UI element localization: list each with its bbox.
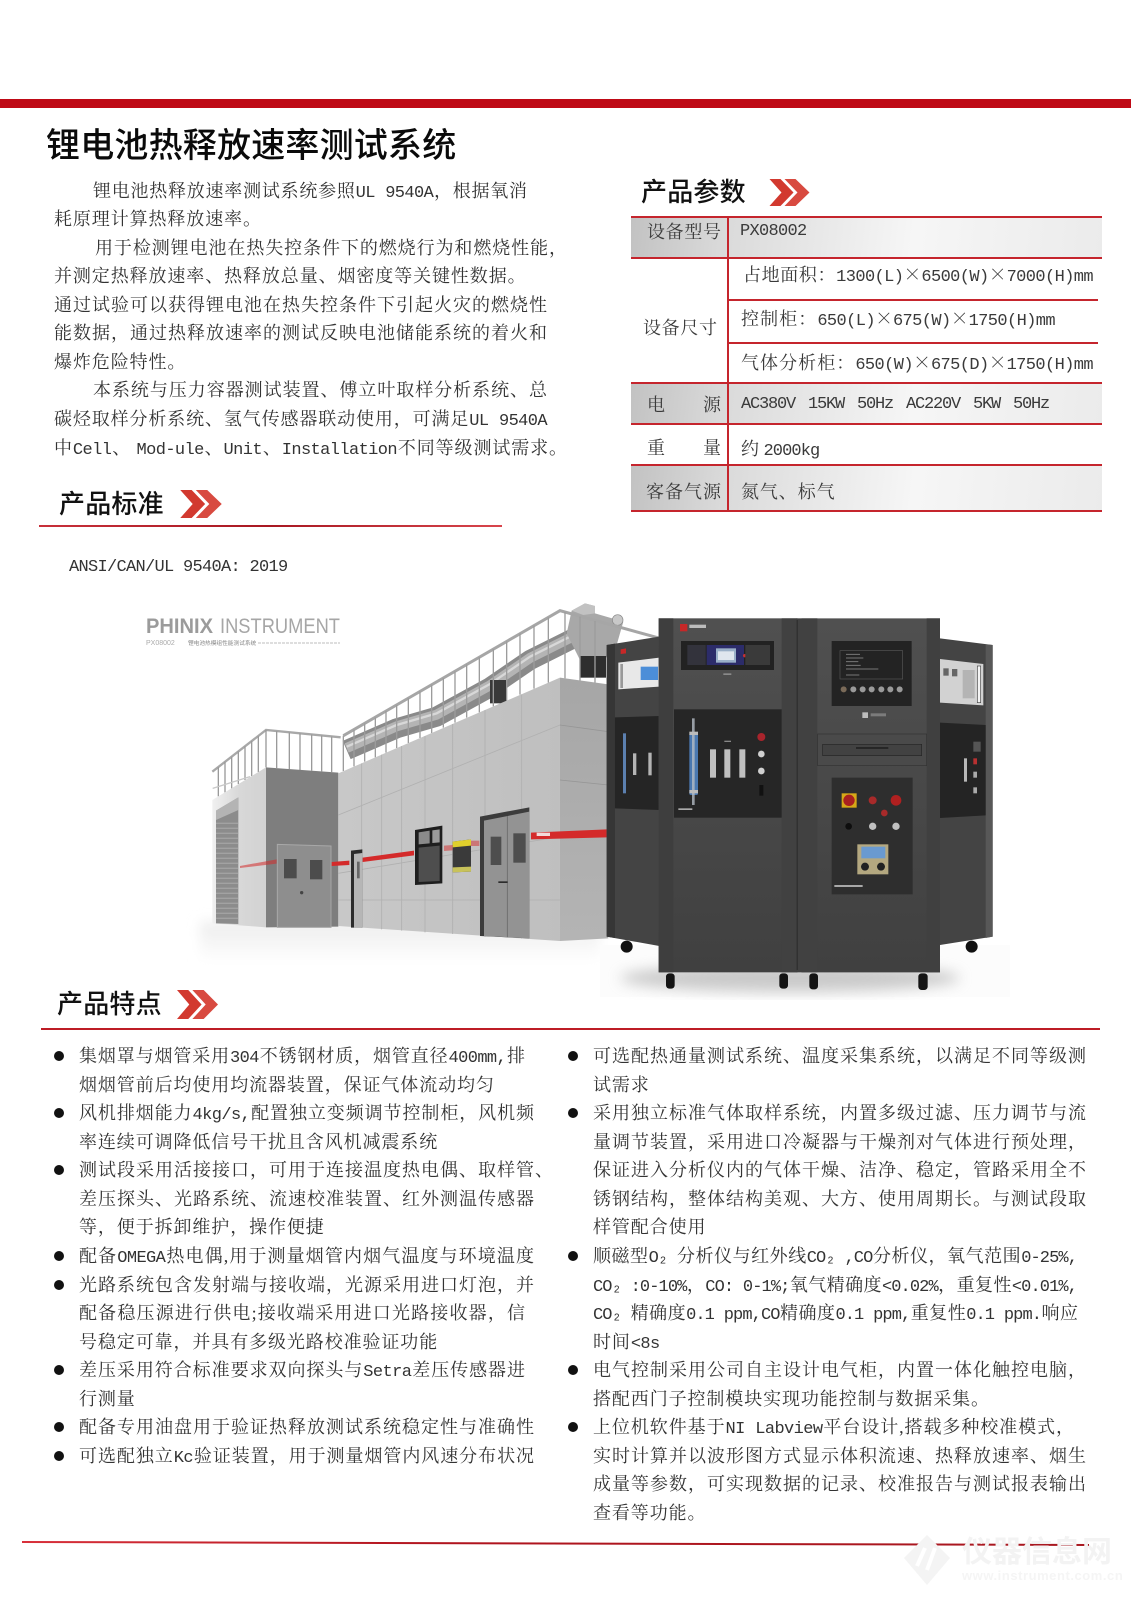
brand text: PX08002 bbox=[146, 640, 175, 647]
intro text block: 通过试验可以获得锂电池在热失控条件下引起火灾的燃烧性 bbox=[54, 295, 547, 315]
feature list: left column: 行测量 bbox=[79, 1389, 136, 1409]
parameter table: 约 2000kg bbox=[741, 439, 819, 461]
feature list: right column: 顺磁型O₂ 分析仪与红外线CO₂ ,CO分析仪，氧气范围0-25%, bbox=[593, 1246, 1077, 1268]
feature list: left column: 烟烟管前后均使用均流器装置，保证气体流动均匀 bbox=[79, 1075, 495, 1095]
intro text block: 中Cell、 Mod-ule、Unit、Installation不同等级测试需求。 bbox=[54, 438, 567, 460]
feature list: left column: 风机排烟能力4kg/s,配置独立变频调节控制柜，风机频 bbox=[79, 1103, 534, 1125]
feature list: left column: 配备OMEGA热电偶,用于测量烟管内烟气温度与环境温度 bbox=[79, 1246, 534, 1268]
parameter table: PX08002 bbox=[740, 222, 807, 241]
standard text: ANSI/CAN/UL 9540A: 2019 bbox=[69, 558, 288, 577]
intro text block bbox=[54, 180, 567, 460]
watermark url: www.instrument.com.cn bbox=[962, 1568, 1123, 1583]
icon: watermark logo bbox=[904, 1536, 950, 1584]
intro text block: 用于检测锂电池在热失控条件下的燃烧行为和燃烧性能， bbox=[95, 238, 567, 258]
feature list: right column: 锈钢结构，整体结构美观、大方、使用周期长。与测试段取 bbox=[593, 1189, 1086, 1209]
feature list: right column: 样管配合使用 bbox=[593, 1217, 706, 1237]
front control cabinet bbox=[797, 618, 940, 990]
heading: product standard: 产品标准 bbox=[59, 489, 164, 519]
parameter table: 设备型号 bbox=[647, 222, 721, 242]
red wall stripes bbox=[240, 829, 607, 868]
ground shadow bbox=[200, 922, 1010, 997]
control panel bbox=[832, 778, 913, 894]
feature list: left column: 可选配独立Kc验证装置，用于测量烟管内风速分布状况 bbox=[79, 1446, 534, 1468]
feature list: right column: 可选配热通量测试系统、温度采集系统，以满足不同等级测 bbox=[593, 1046, 1086, 1066]
touch screen bbox=[832, 641, 912, 706]
cabinets bbox=[607, 618, 993, 990]
parameter table: AC380V 15KW 50Hz AC220V 5KW 50Hz bbox=[741, 395, 1049, 414]
intro text block: 爆炸危险特性。 bbox=[54, 352, 186, 372]
product illustration: chamber and cabinets bbox=[146, 603, 993, 999]
narrow door bbox=[351, 849, 362, 928]
intro text block: 锂电池热释放速率测试系统参照UL 9540A，根据氧消 bbox=[93, 180, 527, 202]
feature list: right column: 电气控制采用公司自主设计电气柜，内置一体化触控电脑， bbox=[593, 1360, 1086, 1380]
watermark bbox=[904, 1536, 1123, 1584]
feature list: right column: 保证进入分析仪内的气体干燥、洁净、稳定，管路采用全不 bbox=[593, 1160, 1086, 1180]
intro text block: 碳烃取样分析系统、氢气传感器联动使用，可满足UL 9540A bbox=[54, 409, 547, 431]
end wall bbox=[560, 678, 608, 941]
double door bbox=[480, 807, 529, 938]
intro text block: 本系统与压力容器测试装置、傅立叶取样分析系统、总 bbox=[93, 380, 547, 400]
parameter table: 控制柜：650(L)×675(W)×1750(H)mm bbox=[741, 305, 1055, 331]
parameter table bbox=[631, 216, 1102, 512]
flowmeter panel bbox=[674, 709, 782, 818]
feature list: right column: 成量等参数，可实现数据的记录、校准报告与测试报表输出 bbox=[593, 1474, 1086, 1494]
feature list: left column: 差压采用符合标准要求双向探头与Setra差压传感器进 bbox=[79, 1360, 525, 1382]
parameter table: 客备气源 bbox=[646, 482, 721, 502]
feature list: right column: 实时计算并以波形图方式显示体积流速、热释放速率、烟生 bbox=[593, 1446, 1086, 1466]
intro text block: 并测定热释放速率、热释放总量、烟密度等关键性数据。 bbox=[54, 266, 526, 286]
top red band bbox=[0, 99, 1131, 108]
window bbox=[415, 826, 442, 885]
left wall and shutter bbox=[212, 767, 266, 927]
warning sign bbox=[453, 839, 471, 872]
feature list: right column: 采用独立标准气体取样系统，内置多级过滤、压力调节与流 bbox=[593, 1103, 1086, 1123]
wheels bbox=[666, 973, 675, 989]
feature list: right column: 量调节装置，采用进口冷凝器与干燥剂对气体进行预处理， bbox=[593, 1132, 1086, 1152]
feature list: right column: 搭配西门子控制模块实现功能控制与数据采集。 bbox=[593, 1389, 990, 1409]
analyser display bbox=[681, 641, 774, 670]
feature list: right column: CO₂ 精确度0.1 ppm,CO精确度0.1 ppm,重复性0.1 ppm.响应 bbox=[593, 1303, 1078, 1325]
feature list: left column: 光路系统包含发射端与接收端，光源采用进口灯泡，并 bbox=[79, 1274, 534, 1294]
icon: chevrons product standard bbox=[180, 490, 222, 518]
feature list: right column bbox=[568, 1046, 1086, 1523]
brand text bbox=[146, 615, 340, 647]
parameter table: 设备尺寸 bbox=[643, 318, 717, 338]
watermark name: 仪器信息网 bbox=[962, 1536, 1112, 1569]
main wall bbox=[338, 678, 560, 941]
feature list: left column: 配备稳压源进行供电;接收端采用进口光路接收器，信 bbox=[79, 1303, 525, 1323]
features rule bbox=[41, 1028, 1100, 1030]
front gas analyser cabinet bbox=[659, 618, 797, 989]
drawer bbox=[818, 734, 927, 766]
feature list: right column: 时间<8s bbox=[593, 1332, 660, 1354]
feature list: right column: CO₂ :0-10%，CO: 0-1%;氧气精确度<0.02%，重复性<0.01%, bbox=[593, 1274, 1077, 1296]
bottom rule bbox=[22, 1541, 1089, 1546]
feature list: left column bbox=[54, 1046, 553, 1468]
main railing bbox=[343, 611, 660, 771]
feature list: left column: 差压探头、光路系统、流速校准装置、红外测温传感器 bbox=[79, 1189, 534, 1209]
title: 锂电池热释放速率测试系统 bbox=[46, 127, 456, 165]
feature list: right column: 查看等功能。 bbox=[593, 1503, 706, 1523]
flue pipe bbox=[347, 633, 577, 750]
back-left cabinet bbox=[607, 637, 659, 953]
left railing bbox=[212, 730, 341, 796]
hood and fan bbox=[490, 603, 623, 703]
icon: chevrons product parameters bbox=[770, 179, 810, 206]
test chamber building bbox=[212, 603, 660, 941]
feature list: left column: 等，便于拆卸维护，操作便捷 bbox=[79, 1217, 325, 1237]
parameter table: 重 量 bbox=[647, 438, 721, 458]
feature list: left column: 号稳定可靠，并具有多级光路校准验证功能 bbox=[79, 1332, 438, 1352]
feature list: left column: 配备专用油盘用于验证热释放测试系统稳定性与准确性 bbox=[79, 1417, 534, 1437]
brand text: PHINIX bbox=[146, 615, 213, 638]
feature list: left column: 测试段采用活接接口，可用于连接温度热电偶、取样管、 bbox=[79, 1160, 553, 1180]
wheels bbox=[809, 973, 818, 989]
brand text: INSTRUMENT bbox=[220, 615, 340, 638]
brand text: 锂电池热模组性能测试系统 bbox=[188, 638, 257, 647]
intro text block: 耗原理计算热释放速率。 bbox=[54, 209, 262, 229]
intro text block: 能数据，通过热释放速率的测试反映电池储能系统的着火和 bbox=[54, 323, 547, 343]
parameter table: 电 源 bbox=[647, 395, 721, 415]
standard rule bbox=[39, 525, 502, 527]
feature list: right column: 试需求 bbox=[593, 1075, 650, 1095]
middle wall and door bbox=[266, 767, 338, 927]
feature list: left column: 集烟罩与烟管采用304不锈钢材质，烟管直径400mm,排 bbox=[79, 1046, 525, 1068]
feature list: right column: 上位机软件基于NI Labview平台设计,搭载多种校准模式， bbox=[593, 1417, 1074, 1439]
parameter table: 占地面积：1300(L)×6500(W)×7000(H)mm bbox=[743, 261, 1093, 287]
parameter table: 氮气、标气 bbox=[741, 482, 836, 502]
heading: product features: 产品特点 bbox=[57, 989, 162, 1019]
parameter table: 气体分析柜：650(W)×675(D)×1750(H)mm bbox=[741, 349, 1093, 375]
icon: chevrons product features bbox=[177, 990, 218, 1019]
feature list: left column: 率连续可调降低信号干扰且含风机减震系统 bbox=[79, 1132, 438, 1152]
back-right cabinet bbox=[940, 638, 993, 953]
heading: product parameters: 产品参数 bbox=[641, 177, 746, 207]
